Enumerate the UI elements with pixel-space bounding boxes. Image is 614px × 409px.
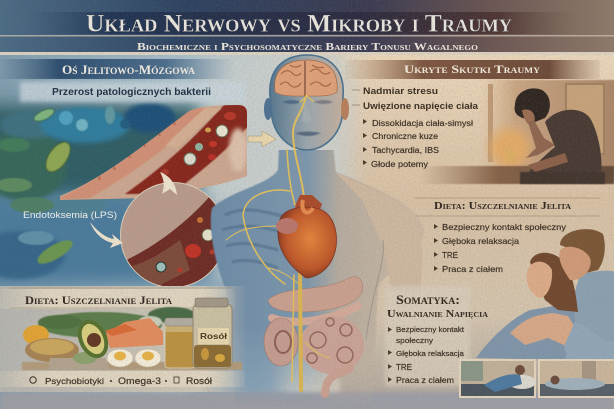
photo: lying person — [459, 359, 536, 398]
list: right diet: Praca z ciałem — [442, 264, 503, 274]
magnified gut circle — [120, 182, 218, 286]
list: right diet: TRE — [442, 250, 458, 260]
intestines — [264, 277, 364, 394]
panel: gut-brain axis — [0, 59, 276, 290]
heading: right diet: Dieta: Uszczelnianie Jelita — [434, 201, 571, 212]
list: right diet: Głęboka relaksacja — [442, 236, 519, 246]
title: Układ Nerwowy vs Mikroby i Traumy — [86, 10, 512, 38]
list: stress and tension — [352, 86, 479, 112]
list: stress and tension: Uwięzione napięcie ciała — [363, 101, 479, 112]
ears — [264, 98, 349, 120]
panel header: hidden effects — [345, 60, 600, 79]
label: bacterial overgrowth — [20, 82, 245, 102]
list: right diet: Bezpieczny kontakt społeczny — [442, 222, 567, 232]
list: somatics: społeczny — [396, 336, 433, 345]
anatomical figure — [211, 55, 424, 405]
list: trauma symptoms: Tachycardia, IBS — [372, 146, 439, 155]
heart — [276, 195, 337, 278]
subheading: releasing tension: Uwalnianie Napięcia — [387, 309, 488, 320]
list: stress and tension: Nadmiar stresu — [363, 86, 438, 97]
label: endotoxemia: Endotoksemia (LPS) — [23, 210, 117, 221]
panel: left diet — [0, 286, 248, 392]
list: trauma symptoms — [363, 119, 473, 169]
vagus nerves — [226, 96, 330, 390]
microbes illustration — [0, 103, 176, 279]
caption strip: Rosół — [186, 376, 212, 386]
heading: left diet: Dieta: Uszczelnianie Jelita — [25, 295, 172, 307]
jar: small — [165, 318, 195, 368]
arrow: gut to brain — [248, 131, 276, 147]
illustration: man in despair — [420, 80, 614, 184]
panel: hidden effects of trauma — [345, 60, 614, 184]
arrow: to magnified circle — [160, 172, 177, 195]
brain — [275, 60, 337, 96]
jar: broth — [193, 298, 232, 368]
list: somatics: Głęboka relaksacja — [396, 349, 465, 358]
ribs — [222, 210, 282, 268]
list: trauma symptoms: Dissokidacja ciała-simysł — [372, 119, 473, 128]
panel header: gut-brain axis: Oś Jelitowo-Mózgowa — [62, 63, 196, 77]
list: somatics — [388, 325, 465, 385]
label: bacterial overgrowth: Przerost patologicznych bakterii — [52, 87, 211, 98]
panel: right diet — [415, 198, 600, 274]
food illustration — [22, 307, 242, 370]
heading: somatics: Somatyka: — [396, 292, 460, 307]
top header band — [0, 0, 614, 55]
jar label: Rosół — [200, 332, 228, 341]
caption strip: Omega-3 — [118, 376, 161, 386]
panel header: gut-brain axis — [0, 59, 235, 79]
list: right diet — [434, 222, 567, 274]
list: trauma symptoms: Głode potemy — [371, 160, 428, 169]
photo: body therapy — [538, 359, 614, 398]
list: somatics: Bezpieczny kontakt — [396, 325, 465, 334]
list: somatics: Praca z ciałem — [396, 376, 454, 385]
torso — [211, 145, 424, 405]
illustration: couple — [476, 229, 614, 360]
arrow: endotoxemia to circle — [90, 222, 123, 248]
list: somatics: TRE — [396, 363, 412, 372]
head — [270, 55, 343, 150]
facial features — [282, 100, 333, 136]
list: trauma symptoms: Chroniczne kuze — [372, 132, 439, 141]
gut wall cross-section — [60, 105, 247, 200]
subtitle: Biochemiczne i Psychosomatyczne Bariery Tonusu Wagalnego — [137, 42, 479, 53]
panel header: hidden effects: Ukryte Skutki Traumy — [404, 62, 540, 76]
caption strip: Psychobiotyki — [45, 376, 104, 386]
panel: somatics — [385, 286, 614, 398]
caption strip — [0, 371, 245, 387]
